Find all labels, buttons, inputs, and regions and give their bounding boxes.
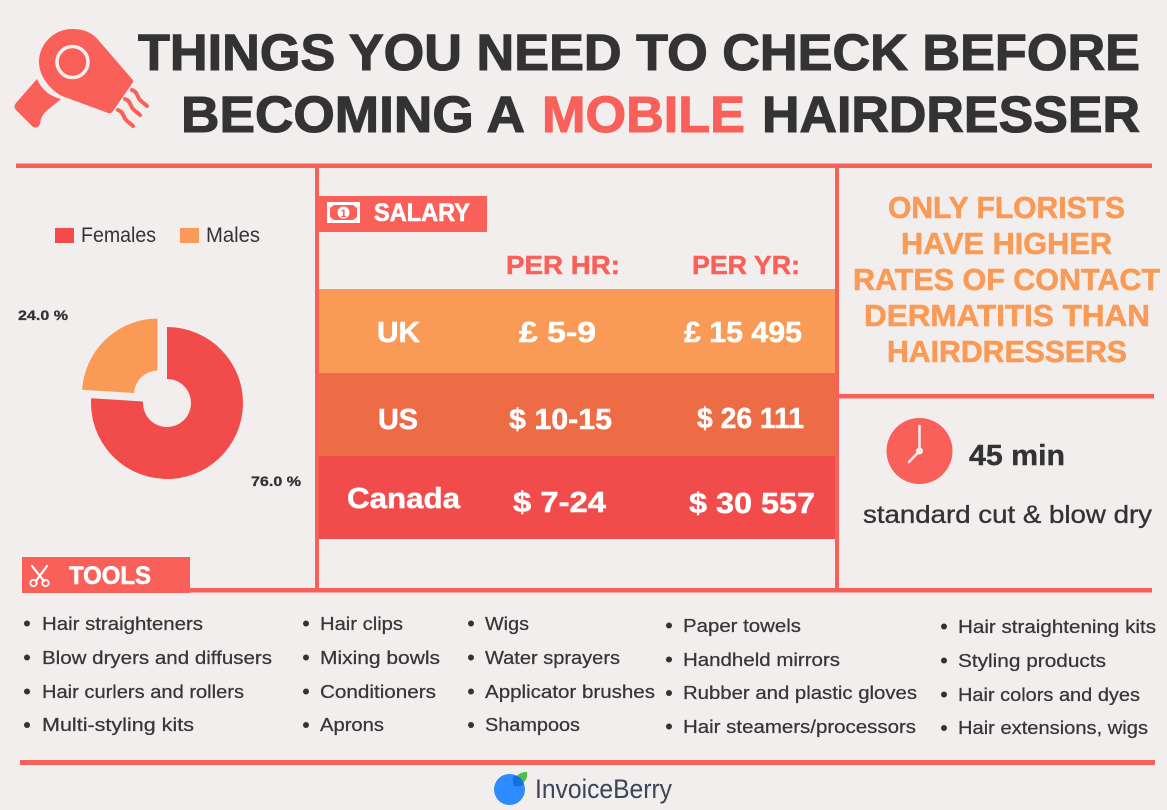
tools list: column 2: Mixing bowls [320,647,440,668]
duration description: standard cut & blow dry [863,501,1153,529]
icon: berry [494,772,527,805]
tools list: column 1: Blow dryers and diffusers [42,647,272,668]
tools list: column 4: Hair steamers/processors [683,716,916,737]
tools list: column 4: Handheld mirrors [683,649,840,670]
row: UK [319,289,835,373]
legend: Males [206,224,260,247]
tools list: column 3 [468,613,655,735]
callout: dermatitis: HAIRDRESSERS [887,334,1127,369]
column headings: PER HR: [506,250,620,280]
tools heading [22,557,190,593]
column headings: PER YR: [692,250,800,280]
panel: gender chart [18,224,302,489]
tools list: column 4: Paper towels [683,615,801,636]
title [138,24,1140,143]
tools list: column 2: Aprons [320,714,384,735]
tools list: column 5: Styling products [958,650,1106,671]
panel: salary [319,196,835,539]
row: US: $ 26 111 [697,403,804,435]
tools list: column 3: Applicator brushes [485,681,655,702]
title: THINGS YOU NEED TO CHECK BEFORE [138,24,1140,81]
row: Canada: $ 7-24 [513,487,606,519]
icon: clock [886,418,952,484]
tools heading: TOOLS [69,562,151,590]
tools list: column 3: Wigs [485,613,529,634]
legend: Females [81,224,156,247]
tools list: column 2 [303,613,440,735]
tools list: column 1 [24,613,272,735]
row: US [319,373,835,456]
tools list: column 1: Hair curlers and rollers [42,681,244,702]
tools list: column 1: Hair straighteners [42,613,203,634]
tools list: column 5: Hair extensions, wigs [958,717,1148,738]
row: UK: £ 15 495 [684,317,802,349]
row: Canada: Canada [347,483,461,515]
panel: time [863,418,1153,529]
tools list: column 5 [941,616,1156,738]
tools list: column 5: Hair straightening kits [958,616,1156,637]
callout: dermatitis: HAVE HIGHER [901,226,1112,261]
tools list: column 3: Shampoos [485,714,580,735]
row: US: US [378,404,418,436]
label: females share: 76.0 % [251,473,302,489]
row: UK: £ 5-9 [519,317,596,349]
tools list: column 5: Hair colors and dyes [958,684,1140,705]
callout: dermatitis [853,190,1160,369]
salary heading: SALARY [374,199,470,227]
callout: dermatitis: DERMATITIS THAN [864,298,1150,333]
title: MOBILE [542,86,745,143]
label: males share: 24.0 % [18,307,69,323]
tools list: column 4: Rubber and plastic gloves [683,682,917,703]
row: US: $ 10-15 [509,404,612,436]
row: UK: UK [377,317,420,349]
salary heading: 1 [340,208,347,220]
logo: InvoiceBerry [494,772,672,805]
tools list: column 2: Hair clips [320,613,403,634]
logo: InvoiceBerry: InvoiceBerry [535,774,672,804]
callout: dermatitis: RATES OF CONTACT [853,262,1160,297]
row: Canada: $ 30 557 [689,488,815,520]
tools list: column 2: Conditioners [320,681,436,702]
icon: scissors [30,566,49,586]
column headings [506,250,800,280]
salary heading [319,196,487,232]
tools list: column 3: Water sprayers [485,647,620,668]
duration: 45 min [969,440,1065,472]
tools list: column 1: Multi-styling kits [42,714,194,735]
icon: hair dryer [14,29,147,128]
title: BECOMING A [181,86,525,143]
callout: dermatitis: ONLY FLORISTS [888,190,1125,225]
legend [55,224,260,247]
donut chart [82,318,243,479]
row: Canada [319,456,835,539]
tools list: column 4 [666,615,917,737]
title: HAIRDRESSER [762,86,1140,143]
